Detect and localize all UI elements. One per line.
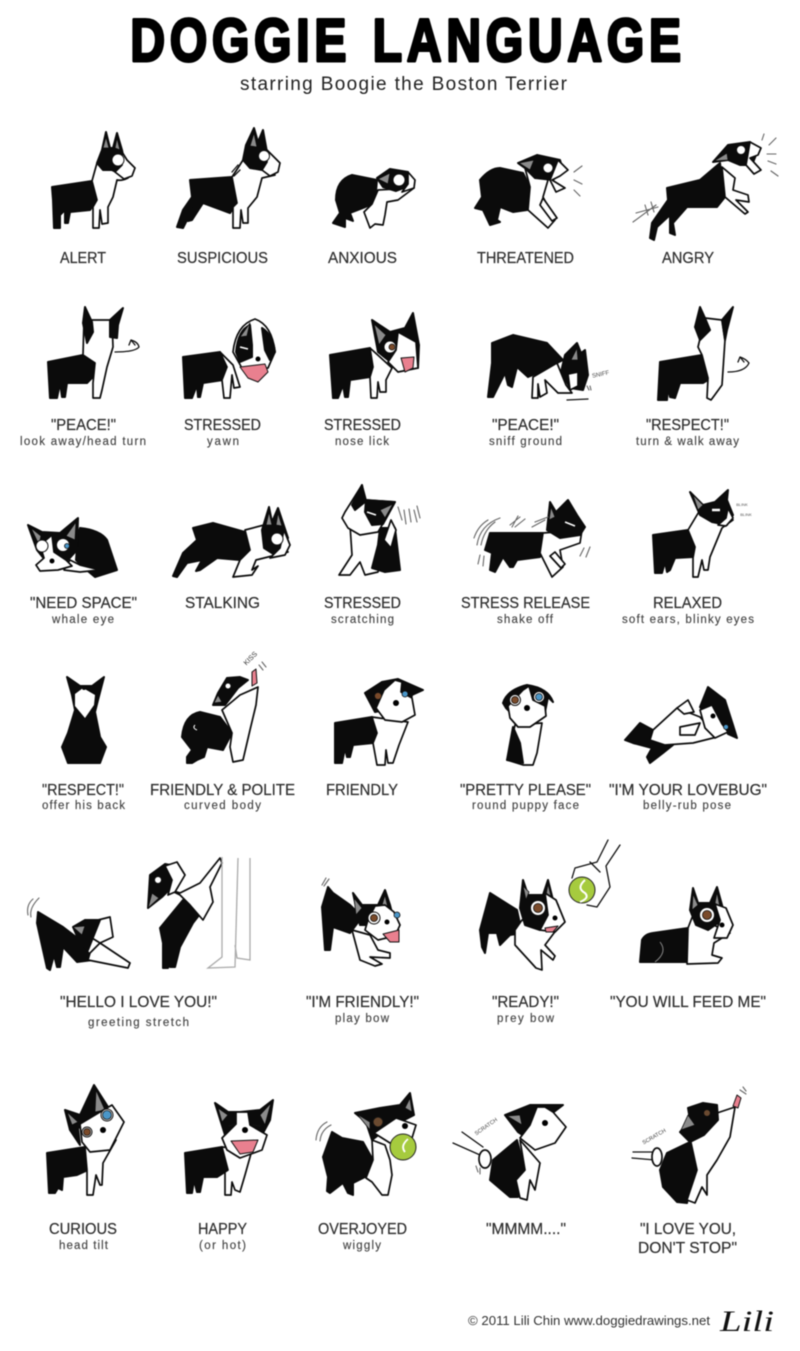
icon: dog yawn (183, 319, 275, 398)
label: friendly polite: FRIENDLY & POLITE (150, 782, 295, 799)
icon: dog you will feed me (640, 887, 733, 964)
icon: dog curious (47, 1085, 124, 1195)
icon: dog friendly (335, 679, 423, 765)
label: peace look away: "PEACE!" (51, 417, 116, 434)
label: need space: "NEED SPACE" (30, 595, 137, 612)
label: i love you dont stop: DON'T STOP" (638, 1240, 737, 1257)
label: peace sniff: "PEACE!" (492, 417, 559, 434)
label: you will feed me: "YOU WILL FEED ME" (610, 994, 766, 1011)
sublabel: prey bow (497, 1013, 555, 1025)
label: i love you dont stop (638, 1221, 737, 1257)
label: stressed nose lick: STRESSED (324, 417, 401, 434)
subtitle: starring Boogie the Boston Terrier (240, 74, 568, 95)
label: respect back: "RESPECT!" (42, 782, 124, 799)
icon: dog suspicious (177, 128, 280, 228)
icon: dog nose lick (330, 313, 419, 398)
icon: dog stretching on leg (148, 857, 250, 968)
sublabel: greeting stretch (88, 1017, 189, 1029)
sublabel: sniff ground (489, 436, 562, 448)
icon: dog relaxed: BLINK (740, 512, 752, 517)
icon: dog play bow (322, 878, 400, 966)
label: lovebug: "I'M YOUR LOVEBUG" (609, 782, 767, 799)
label: pretty please: "PRETTY PLEASE" (460, 782, 591, 799)
sublabel: round puppy face (472, 800, 579, 812)
icon: dog whale eye (28, 518, 117, 577)
icon: dog walk away (658, 307, 749, 400)
label: anxious: ANXIOUS (328, 250, 397, 267)
icon: dog stalking (173, 507, 290, 577)
label: i love you dont stop: "I LOVE YOU, (640, 1221, 736, 1238)
sublabel: look away/head turn (20, 436, 146, 448)
sublabel: head tilt (59, 1240, 109, 1252)
icon: dog offer back (62, 677, 106, 763)
sublabel: whale eye (51, 614, 114, 626)
label: mmmm: "MMMM...." (486, 1221, 566, 1238)
label: im friendly: "I'M FRIENDLY!" (306, 994, 419, 1011)
footer credit: © 2011 Lili Chin www.doggiedrawings.net (468, 1313, 710, 1328)
sublabel: belly-rub pose (643, 800, 731, 812)
label: angry: ANGRY (662, 250, 714, 267)
label: ready: "READY!" (492, 994, 559, 1011)
icon: dog lovebug (625, 687, 737, 763)
signature: Lili (719, 1305, 774, 1338)
sublabel: nose lick (335, 436, 389, 448)
icon: dog overjoyed with ball (316, 1093, 416, 1195)
label: respect turn: "RESPECT!" (646, 417, 729, 434)
label: stressed yawn: STRESSED (184, 417, 261, 434)
title: DOGGIE (130, 7, 351, 74)
sublabel: turn & walk away (636, 436, 739, 448)
icon: dog i love you scratch (632, 1087, 746, 1203)
sublabel: soft ears, blinky eyes (622, 614, 754, 626)
sublabel: wiggly (342, 1240, 381, 1252)
sublabel: offer his back (42, 800, 125, 812)
icon: dog scratching (339, 485, 420, 575)
icon: dog alert (52, 132, 135, 228)
label: stress release: STRESS RELEASE (461, 595, 590, 612)
sublabel: shake off (497, 614, 554, 626)
icon: dog mmmm scratch: SCRATCH (474, 1117, 499, 1137)
label: threatened: THREATENED (477, 250, 574, 267)
icon: dog greeting stretch (28, 898, 130, 970)
sublabel: (or hot) (199, 1240, 246, 1252)
label: stressed scratching: STRESSED (324, 595, 401, 612)
icon: dog friendly polite (182, 651, 266, 763)
label: happy: HAPPY (198, 1221, 247, 1238)
sublabel: curved body (184, 800, 261, 812)
label: suspicious: SUSPICIOUS (177, 250, 268, 267)
icon: dog i love you scratch: SCRATCH (642, 1128, 667, 1146)
icon: dog shake off (474, 500, 590, 577)
icon: dog happy (185, 1100, 273, 1195)
sublabel: scratching (331, 614, 394, 626)
icon: dog angry (633, 134, 778, 240)
icon: dog relaxed: BLINK (736, 502, 748, 507)
label: friendly: FRIENDLY (326, 782, 398, 799)
label: relaxed: RELAXED (653, 595, 722, 612)
label: curious: CURIOUS (49, 1221, 117, 1238)
icon: dog look away (48, 307, 139, 398)
icon: dog anxious (333, 169, 415, 228)
icon: dog friendly polite: KISS (243, 651, 259, 667)
label: stalking: STALKING (185, 595, 260, 612)
label: overjoyed: OVERJOYED (318, 1221, 407, 1238)
sublabel: yawn (207, 436, 239, 448)
icon: dog sniff ground: SNIFF (592, 370, 610, 380)
label: hello i love you: "HELLO I LOVE YOU!" (60, 994, 217, 1011)
icon: dog relaxed (653, 490, 752, 577)
icon: dog pretty please (503, 685, 553, 765)
label: alert: ALERT (60, 250, 106, 267)
sublabel: play bow (335, 1013, 390, 1025)
icon: dog mmmm scratch (453, 1105, 566, 1200)
title (130, 7, 686, 74)
icon: dog threatened (475, 155, 582, 228)
icon: dog prey bow with ball (480, 840, 620, 970)
title: LANGUAGE (373, 7, 686, 74)
icon: dog sniff ground (488, 335, 610, 400)
